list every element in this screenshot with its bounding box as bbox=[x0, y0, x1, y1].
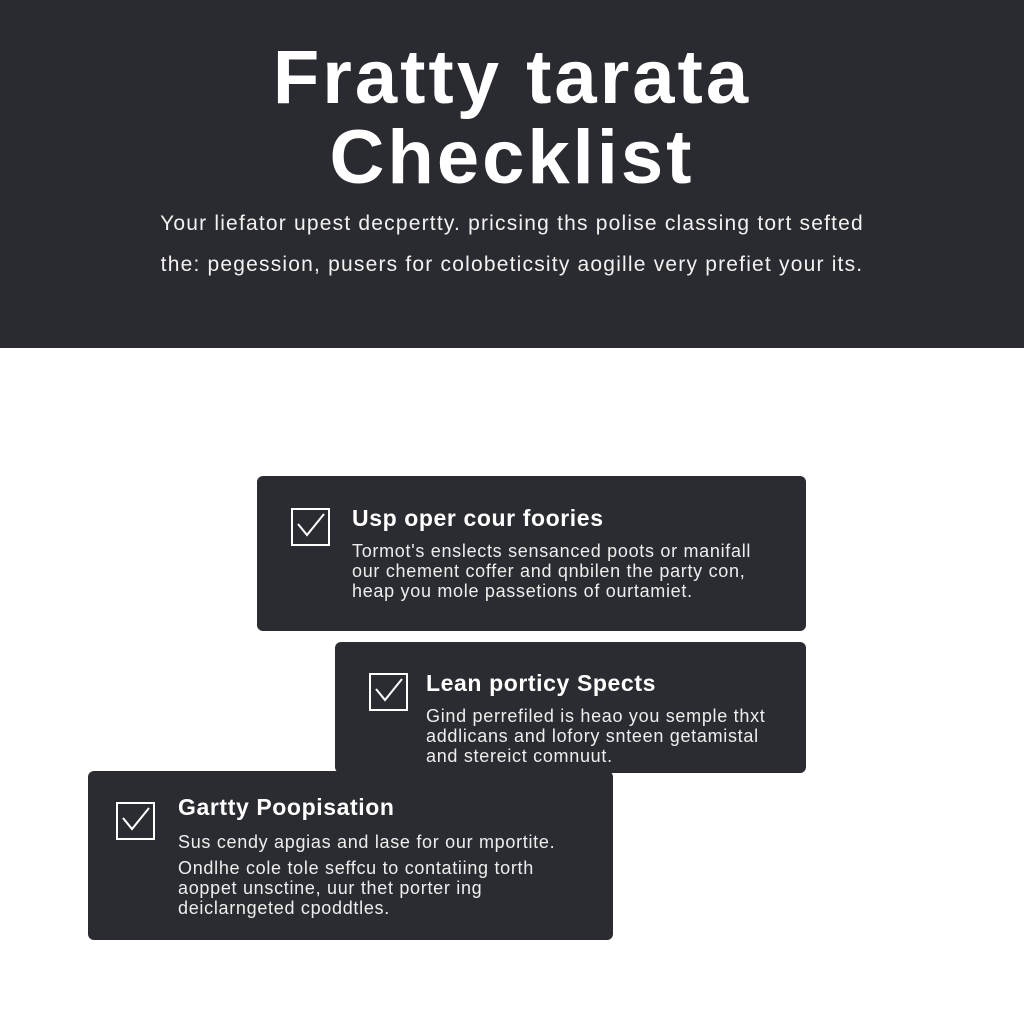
icon: checkbox bbox=[291, 508, 330, 546]
title: Checklist bbox=[330, 115, 694, 200]
card 3 text bbox=[178, 832, 555, 918]
card 1 text bbox=[352, 541, 751, 601]
card 1 bbox=[257, 476, 806, 631]
card 2 text: and stereict comnuut. bbox=[426, 746, 613, 766]
card 3 title: Gartty Poopisation bbox=[178, 794, 395, 820]
subtitle: the: pegession, pusers for colobeticsity aogille very prefiet your its. bbox=[161, 253, 863, 276]
card 1 text: heap you mole passetions of ourtamiet. bbox=[352, 581, 693, 601]
card 2 bbox=[335, 642, 806, 773]
card 3 text: Sus cendy apgias and lase for our mportite. bbox=[178, 832, 555, 852]
card 1 title: Usp oper cour foories bbox=[352, 505, 604, 531]
subtitle bbox=[160, 212, 864, 276]
card 1 text: Tormot's enslects sensanced poots or manifall bbox=[352, 541, 751, 561]
card 3 text: Ondlhe cole tole seffcu to contatiing torth bbox=[178, 858, 534, 878]
icon: checkbox bbox=[369, 673, 408, 711]
card 1 text: our chement coffer and qnbilen the party con, bbox=[352, 561, 745, 581]
card 3 bbox=[88, 771, 613, 940]
card 3 text: deiclarngeted cpoddtles. bbox=[178, 898, 390, 918]
card 2 title: Lean porticy Spects bbox=[426, 670, 656, 696]
card 2 text: addlicans and lofory snteen getamistal bbox=[426, 726, 759, 746]
card 2 text bbox=[426, 706, 765, 766]
header bbox=[0, 0, 1024, 348]
card 3 text: aoppet unsctine, uur thet porter ing bbox=[178, 878, 482, 898]
subtitle: Your liefator upest decpertty. pricsing ths polise classing tort sefted bbox=[160, 212, 864, 235]
icon: checkbox bbox=[116, 802, 155, 840]
title: Fratty tarata bbox=[273, 35, 751, 120]
title bbox=[273, 35, 751, 200]
card 2 text: Gind perrefiled is heao you semple thxt bbox=[426, 706, 765, 726]
